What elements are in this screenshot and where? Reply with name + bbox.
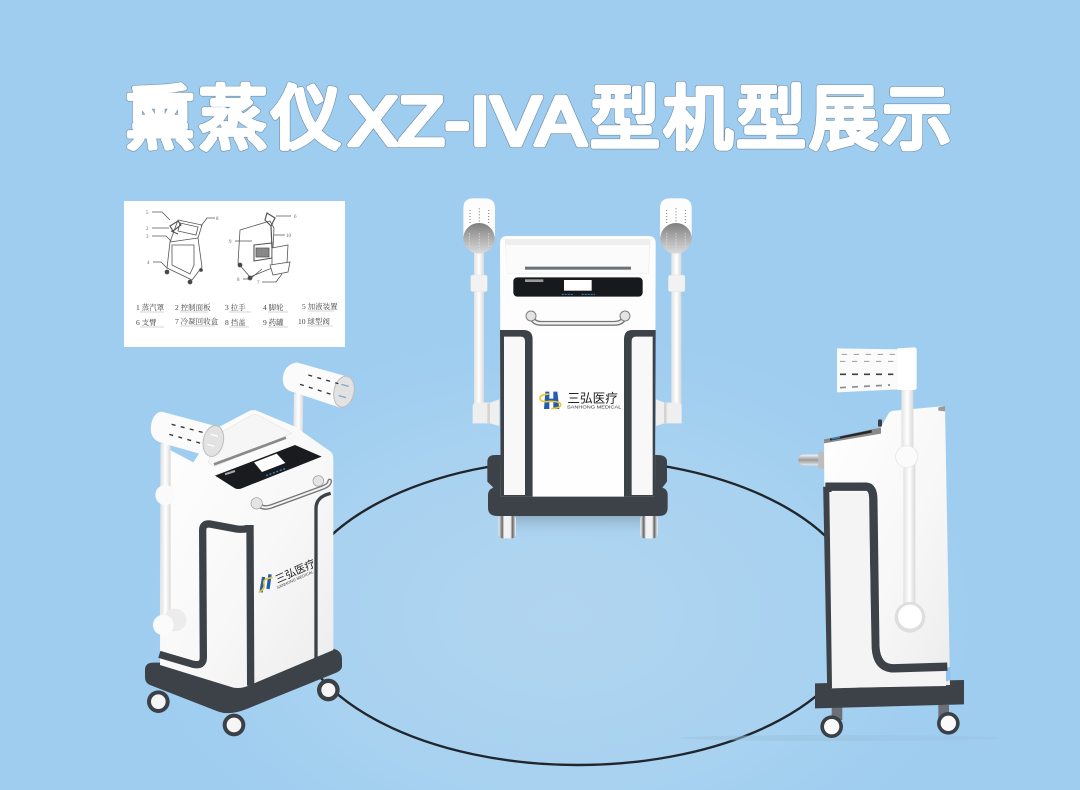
top control edge	[824, 419, 882, 443]
numbered parts legend	[136, 301, 338, 327]
wheels	[820, 705, 960, 738]
line drawing: machine rear view	[235, 213, 291, 282]
title: XZ-IVA	[348, 82, 586, 160]
machine: right side view	[798, 347, 964, 738]
numbered parts legend: 9 药罐	[263, 317, 284, 327]
title: 熏蒸仪	[125, 80, 344, 158]
logo: Sanhong Medical: 三弘医疗	[567, 391, 618, 405]
numbered parts legend: 4 脚轮	[263, 302, 284, 312]
handle	[251, 476, 330, 509]
handle	[526, 311, 630, 323]
diagram callout numbers: 5	[146, 211, 149, 216]
diagram callout numbers: 7	[257, 281, 260, 286]
diagram callout numbers: 6	[294, 215, 297, 220]
numbered parts legend: 8 挡盖	[225, 317, 246, 327]
numbered parts legend: 7 冷凝回收盒	[175, 316, 219, 326]
logo: Sanhong Medical: SANHONG MEDICAL	[276, 569, 315, 590]
title: 熏蒸仪	[125, 80, 344, 158]
side panels	[504, 337, 653, 495]
ring line connecting the three machine views	[293, 459, 863, 765]
diagram callout numbers: 3	[146, 235, 149, 240]
logo: Sanhong Medical: 三弘医疗	[273, 557, 318, 586]
logo: Sanhong Medical	[540, 391, 622, 410]
tray	[208, 414, 292, 467]
logo: Sanhong Medical	[259, 557, 318, 592]
wheels	[147, 679, 340, 736]
panel: parts diagram	[124, 201, 345, 347]
line drawing: machine front view	[152, 212, 215, 284]
body	[160, 410, 333, 688]
head	[837, 347, 917, 392]
diagram callout numbers: 4	[147, 261, 150, 266]
body	[824, 406, 950, 688]
floor shadow: right machine	[680, 735, 1000, 741]
rear head and support	[283, 362, 357, 438]
numbered parts legend: 2 控制面板	[175, 302, 211, 312]
title: 型机型展示	[590, 80, 955, 158]
title	[125, 80, 955, 160]
rear strip	[946, 667, 951, 681]
tray	[505, 239, 651, 274]
body	[500, 236, 656, 497]
centre panel	[533, 330, 624, 496]
diagram callout numbers	[146, 211, 297, 286]
diagram callout numbers: 9	[229, 240, 232, 245]
arm	[895, 390, 925, 633]
machine: centre front view	[463, 198, 692, 538]
wheels	[499, 515, 658, 538]
title: 型机型展示	[590, 80, 955, 158]
dark trim	[159, 493, 331, 686]
floor shadow: centre machine	[500, 514, 652, 538]
numbered parts legend: 1 蒸汽罩	[136, 302, 165, 312]
dark side trims	[500, 330, 656, 497]
diagram callout numbers: 2	[146, 227, 149, 232]
title: XZ-IVA	[348, 82, 586, 160]
numbered parts legend: 5 加液装置	[302, 301, 338, 311]
base	[815, 680, 964, 708]
nozzle	[798, 452, 824, 469]
arm on near side	[151, 412, 226, 635]
numbered parts legend: 3 拉手	[225, 302, 246, 312]
left arm	[463, 198, 499, 426]
control panel	[513, 277, 643, 297]
machine: left three-quarter view	[145, 362, 357, 736]
diagram callout numbers: 8	[237, 278, 240, 283]
diagram callout numbers: 8	[216, 217, 219, 222]
right arm	[656, 198, 692, 426]
numbered parts legend: 10 球型阀	[298, 316, 330, 326]
base	[145, 648, 342, 713]
logo: Sanhong Medical: SANHONG MEDICAL	[567, 405, 622, 410]
base	[487, 455, 668, 516]
dark trim	[825, 487, 947, 688]
numbered parts legend: 6 支臂	[136, 317, 157, 327]
control panel	[215, 445, 322, 489]
diagram callout numbers: 10	[286, 234, 292, 239]
